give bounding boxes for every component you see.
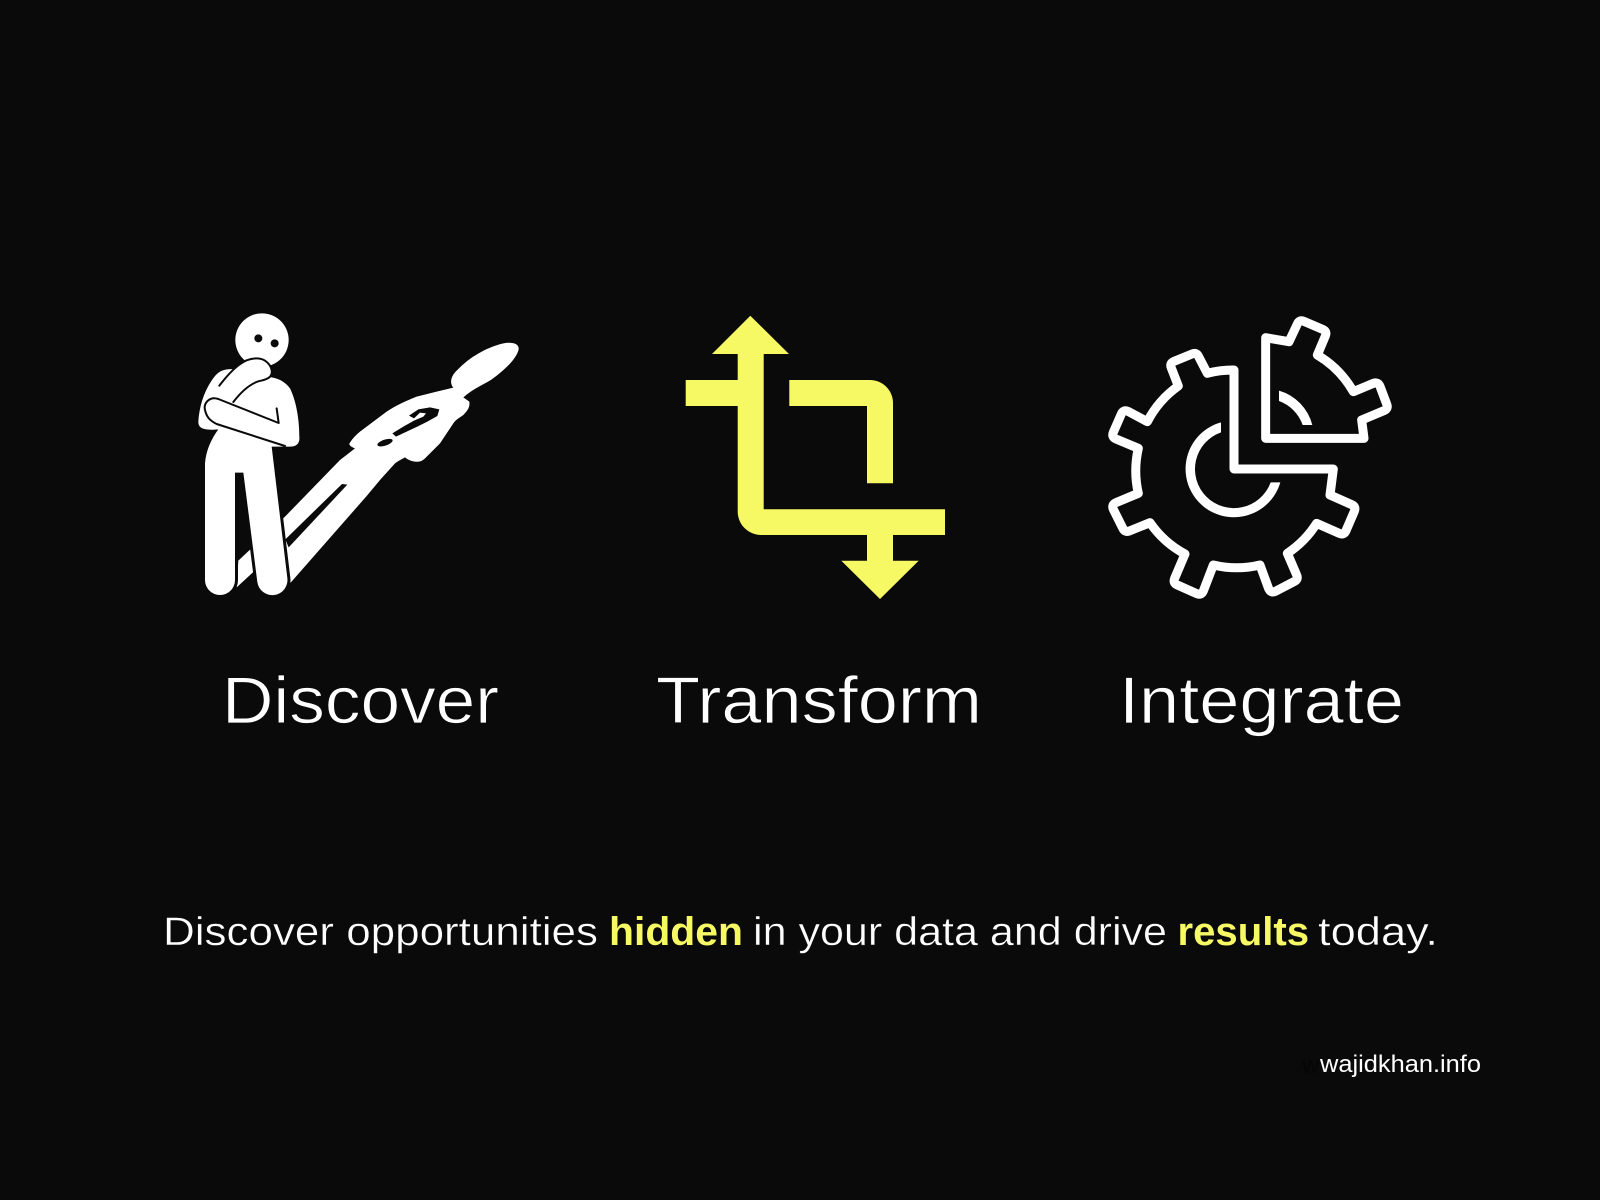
- tagline: in your data and drive: [753, 910, 1167, 954]
- crossed forearm: [205, 398, 285, 446]
- head: [235, 313, 289, 367]
- icon: thinking person with question-mark shadow: [198, 313, 519, 595]
- quarter inner arc: [1279, 391, 1312, 425]
- icon: gear with detached quarter: [1113, 321, 1387, 594]
- tagline: today.: [1318, 910, 1438, 954]
- gear hub arc: [1186, 422, 1280, 517]
- detached quarter outline: [1266, 321, 1387, 438]
- main gear outline: [1113, 353, 1355, 594]
- label: Transform: Transform: [656, 663, 982, 737]
- tagline: hidden: [609, 910, 743, 954]
- icon: crop arrows: [686, 316, 945, 599]
- hand on chin: [219, 358, 272, 402]
- footer website: wajidkhan.info: [1319, 1051, 1481, 1078]
- eyes: [254, 334, 279, 347]
- shadow: [237, 343, 519, 587]
- body: [198, 369, 299, 595]
- tagline: [163, 910, 1438, 954]
- tagline: Discover opportunities: [163, 910, 598, 954]
- label: Discover: Discover: [222, 663, 499, 737]
- footer website: w: [1301, 1052, 1320, 1079]
- tagline: results: [1178, 910, 1309, 954]
- label: Integrate: Integrate: [1119, 663, 1404, 737]
